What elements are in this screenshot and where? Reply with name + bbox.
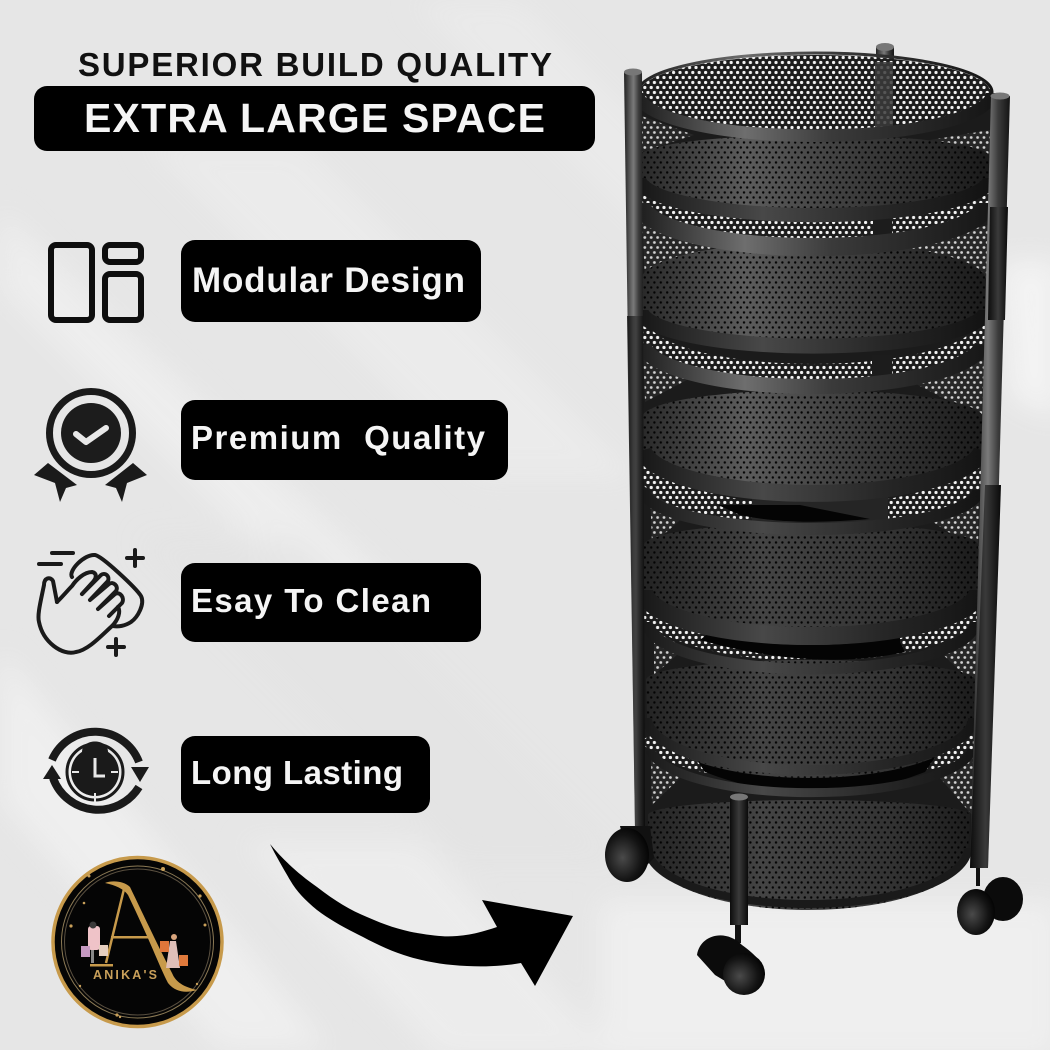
tier 6 <box>648 735 975 910</box>
tier 3 <box>641 325 985 501</box>
arrow <box>270 844 573 986</box>
interior back wall <box>639 55 991 131</box>
logo figures <box>81 922 188 968</box>
icon: long lasting clock <box>43 732 149 810</box>
heading pill: extra large space: EXTRA LARGE SPACE <box>84 95 545 141</box>
logo: anika's badge <box>53 858 222 1026</box>
front caster <box>697 923 765 995</box>
right pole <box>970 92 1010 868</box>
label: long lasting: Long Lasting <box>191 754 403 791</box>
rear-left caster <box>605 826 654 882</box>
icon: hand wiping <box>38 550 143 655</box>
product: rotating mesh rack <box>605 43 1023 995</box>
label: long lasting <box>181 736 430 813</box>
tier 4 <box>644 462 980 645</box>
heading pill: extra large space <box>34 86 595 151</box>
left pole <box>624 68 645 830</box>
icon: modular layout <box>51 245 141 320</box>
label: modular design: Modular Design <box>192 261 465 300</box>
right caster <box>957 868 1023 935</box>
label: modular design <box>181 240 481 322</box>
logo text: ANIKA'S <box>93 968 157 982</box>
label: esay to clean <box>181 563 481 642</box>
logo letter A <box>90 881 197 992</box>
tier 2 <box>640 188 988 353</box>
front pole <box>730 794 748 925</box>
label: esay to clean: Esay To Clean <box>191 582 431 619</box>
rack column <box>634 91 992 850</box>
label: premium quality: Premium Quality <box>191 419 486 456</box>
label: premium quality <box>181 400 508 480</box>
back pole <box>876 43 894 77</box>
tier 1 <box>638 53 992 222</box>
title: superior build quality: SUPERIOR BUILD QUALITY <box>78 46 552 83</box>
tier 5 <box>646 600 976 778</box>
icon: quality badge <box>34 392 147 502</box>
